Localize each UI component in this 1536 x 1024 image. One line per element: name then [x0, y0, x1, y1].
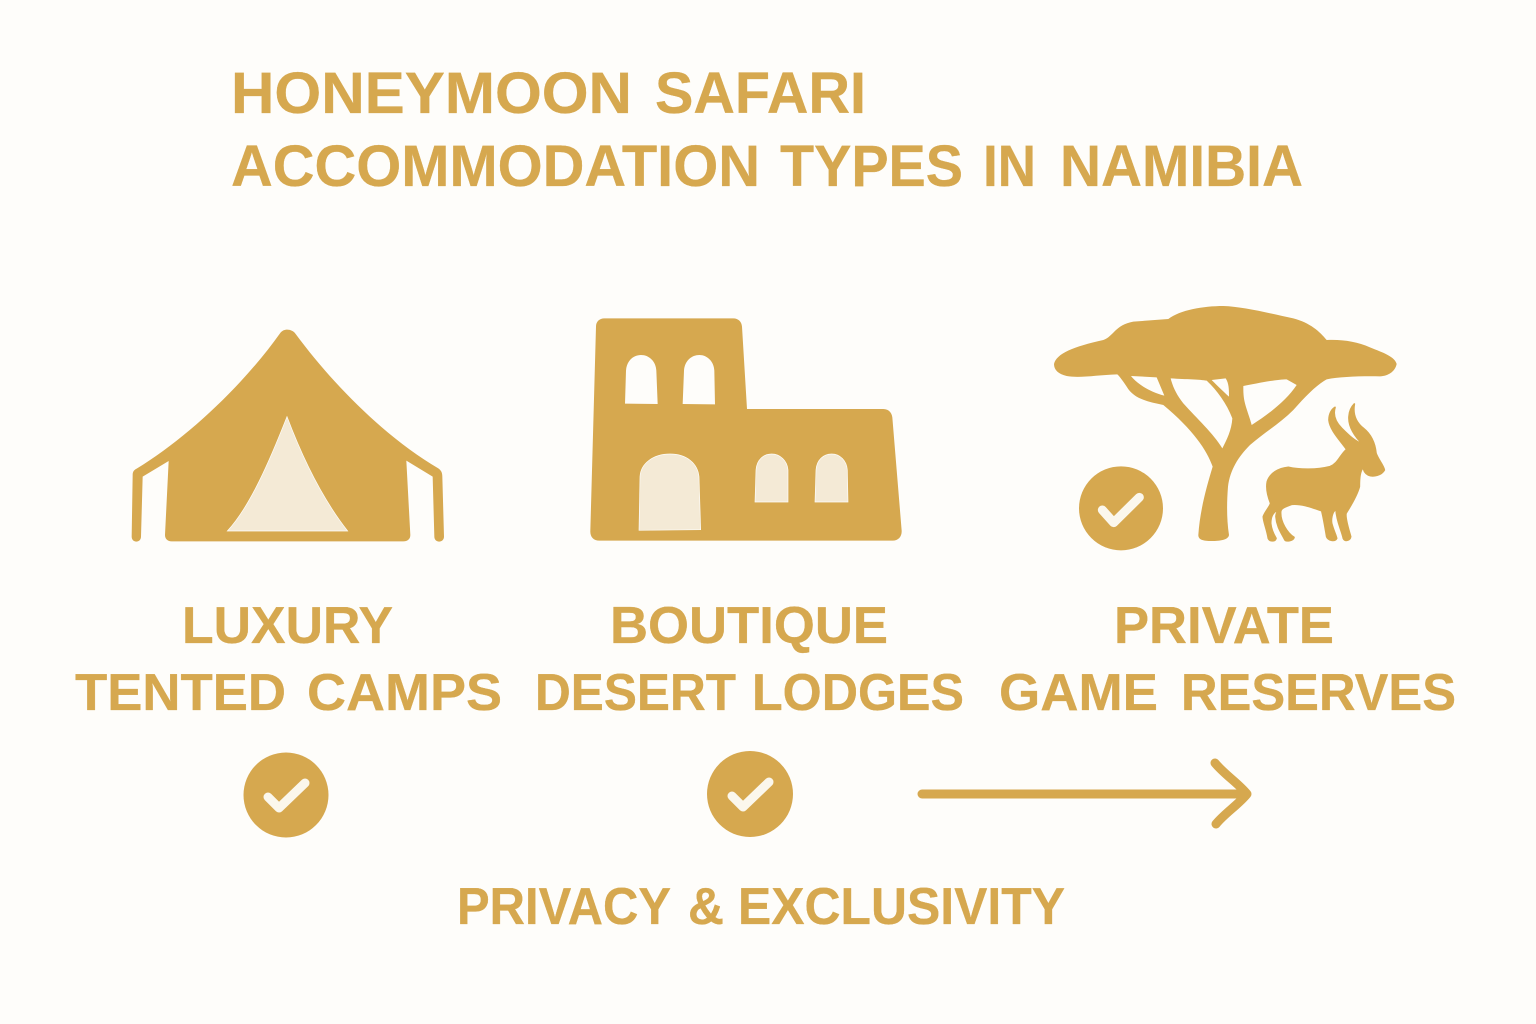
icon: acacia tree with antelope [1054, 306, 1397, 550]
caption: privacy and exclusivity: & [688, 878, 724, 936]
arrow [922, 763, 1247, 824]
icon: desert lodge [590, 318, 902, 541]
lodge door and lower windows [639, 454, 848, 530]
caption: privacy and exclusivity: PRIVACY [457, 878, 671, 936]
caption: privacy and exclusivity: EXCLUSIVITY [738, 878, 1065, 936]
antelope [1263, 404, 1384, 541]
label: private game reserves [999, 597, 1456, 722]
title: IN [983, 134, 1036, 199]
label: private game reserves: GAME [999, 664, 1158, 722]
check badge: desert lodges [707, 751, 793, 837]
label: luxury tented camps: TENTED [75, 664, 286, 722]
title: TYPES [780, 134, 963, 199]
acacia tree [1054, 306, 1397, 541]
title: ACCOMMODATION [231, 134, 760, 199]
label: luxury tented camps: LUXURY [182, 597, 393, 655]
label: private game reserves: PRIVATE [1114, 597, 1334, 655]
label: luxury tented camps: CAMPS [307, 664, 502, 722]
label: boutique desert lodges: BOUTIQUE [610, 597, 888, 655]
icon: luxury tent [132, 330, 444, 542]
tent door [227, 417, 348, 531]
title: SAFARI [655, 61, 866, 126]
title [231, 61, 1303, 199]
label: luxury tented camps [75, 597, 502, 722]
label: boutique desert lodges: DESERT [535, 664, 736, 722]
check badge: tented camps [244, 752, 328, 838]
label: boutique desert lodges: LODGES [752, 664, 964, 722]
upper windows [625, 355, 715, 404]
caption: privacy and exclusivity [457, 878, 1065, 936]
check badge [1079, 466, 1163, 550]
title: HONEYMOON [231, 61, 632, 126]
title: NAMIBIA [1060, 134, 1303, 199]
label: private game reserves: RESERVES [1181, 664, 1456, 722]
label: boutique desert lodges [535, 597, 964, 722]
